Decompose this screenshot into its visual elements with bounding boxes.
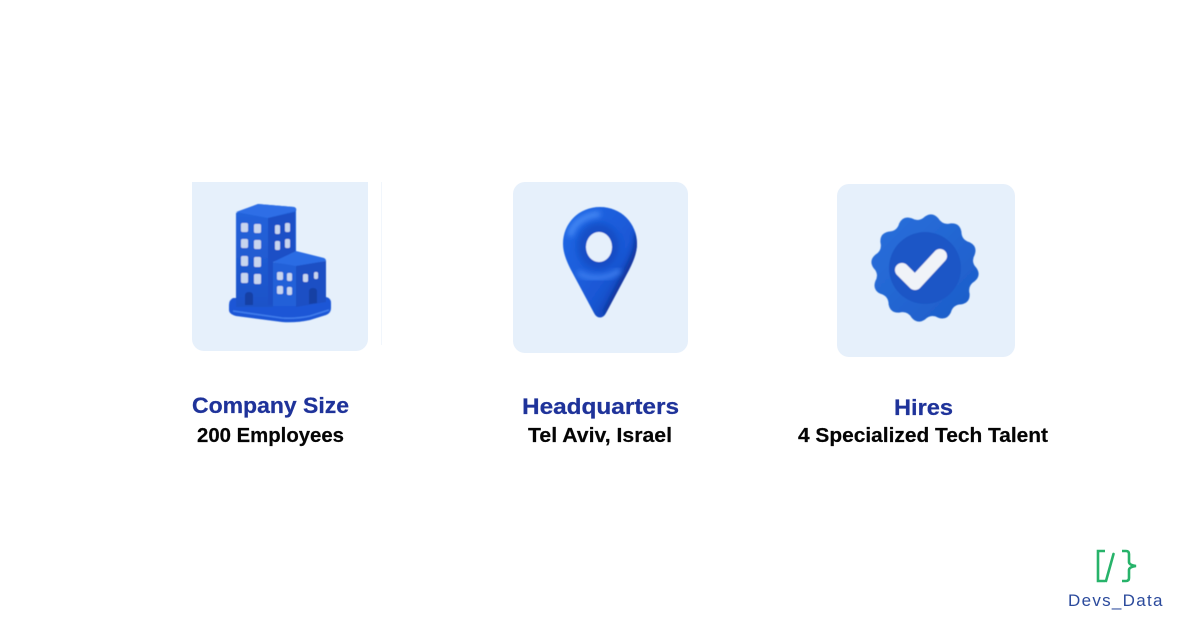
icon: office building bbox=[229, 204, 331, 322]
heading: company size: Company Size bbox=[192, 393, 349, 418]
wordmark: Devs_Data bbox=[1068, 591, 1164, 610]
card: headquarters background bbox=[513, 182, 688, 353]
heading: headquarters: Headquarters bbox=[522, 394, 679, 419]
heading: hires: Hires bbox=[894, 395, 953, 420]
panel: hires bbox=[837, 184, 1015, 357]
faint divider sliver bbox=[381, 182, 382, 345]
icon: location pin bbox=[563, 207, 638, 318]
icon: code bracket mark bbox=[1098, 551, 1136, 581]
text: 200 employees: 200 Employees bbox=[197, 425, 344, 447]
card: hires background bbox=[837, 184, 1015, 357]
windows bbox=[241, 223, 318, 295]
icon: verified badge bbox=[871, 214, 979, 322]
panel: company size bbox=[192, 182, 368, 351]
card: company size background bbox=[192, 182, 368, 351]
check mark bbox=[902, 256, 940, 283]
panel: headquarters bbox=[513, 182, 688, 353]
logo: devs data bbox=[1068, 551, 1164, 610]
text: 4 specialized tech talent: 4 Specialized Tech Talent bbox=[798, 425, 1048, 447]
text: tel aviv, israel: Tel Aviv, Israel bbox=[528, 425, 672, 447]
